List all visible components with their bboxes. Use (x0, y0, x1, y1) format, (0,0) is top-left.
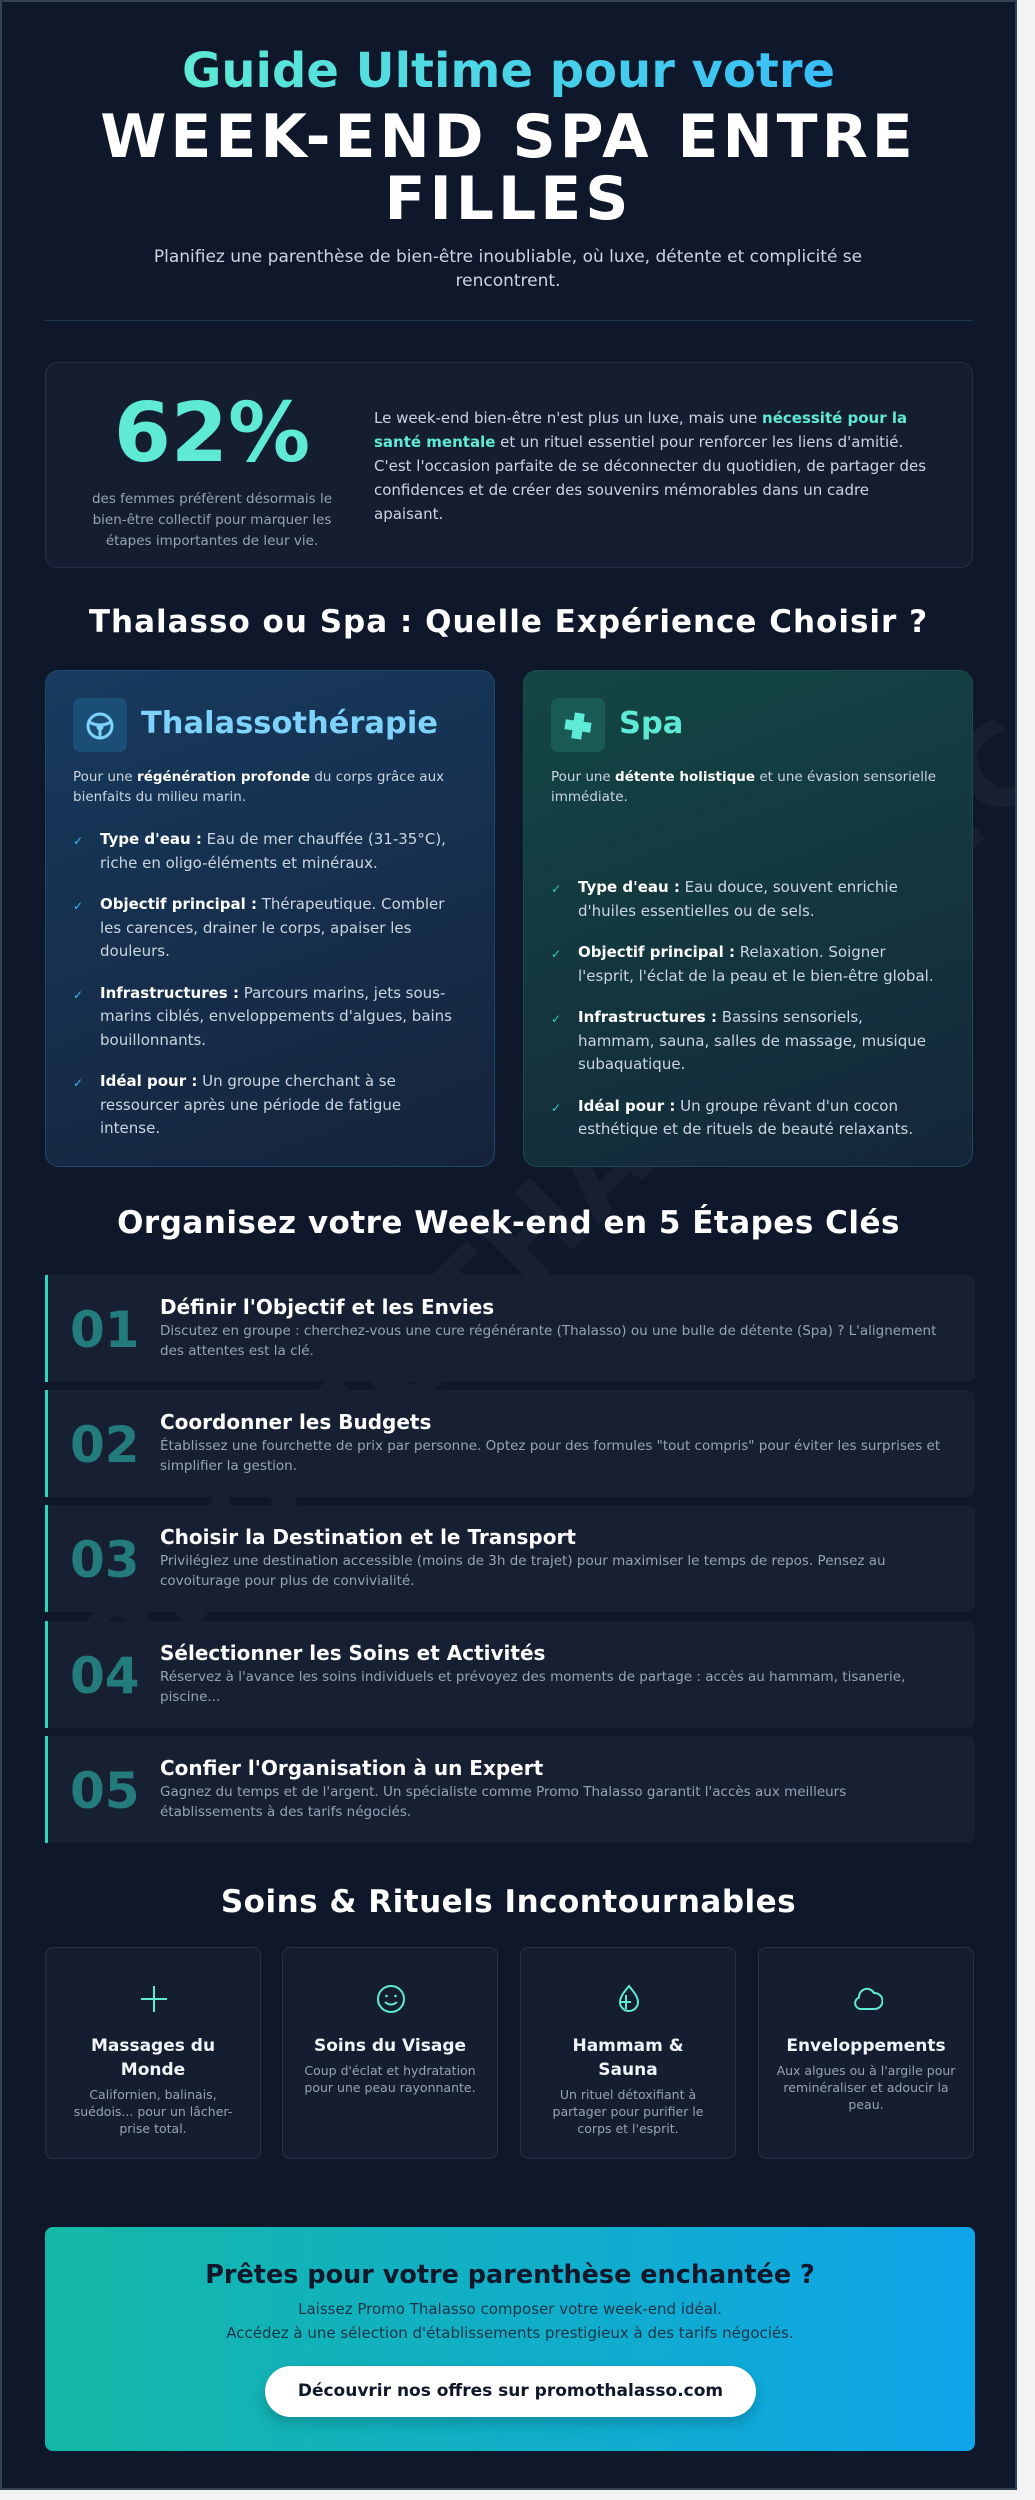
step 01: 01 (70, 1301, 140, 1359)
title: Spa (619, 706, 683, 741)
list (74, 830, 452, 1137)
soin: visage: Coup d'éclat et hydratation pour une peau rayonnante. (304, 2063, 476, 2095)
panel: thalassothérapie: Pour une régénération profonde du corps grâce aux bienfaits du milieu marin. (73, 769, 444, 805)
step 04: 04 (70, 1647, 140, 1705)
list: Idéal pour : Un groupe rêvant d'un cocon esthétique et de rituels de beauté relaxants. (578, 1096, 913, 1138)
soin: enveloppements: Enveloppements (786, 2036, 946, 2056)
list: Infrastructures : Bassins sensoriels, hammam, sauna, salles de massage, musique subaquatique. (578, 1008, 926, 1073)
CTA: Prêtes pour votre parenthèse enchantée ? (205, 2260, 815, 2290)
step 02: Coordonner les Budgets (160, 1410, 431, 1434)
step 03: Privilégiez une destination accessible (moins de 3h de trajet) pour maximiser le temps de repos. Pensez au covoiturage pour plus de convivialité. (160, 1553, 886, 1589)
step 05: Confier l'Organisation à un Expert (160, 1756, 543, 1780)
panel: thalassothérapie (45, 670, 495, 1167)
list: Infrastructures : Parcours marins, jets sous-marins ciblés, enveloppements d'algues, bains bouillonnants. (100, 984, 452, 1048)
list: Type d'eau : Eau douce, souvent enrichie d'huiles essentielles ou de sels. (578, 878, 898, 920)
step 05 (45, 1736, 975, 1843)
soin: hammam: Sauna (598, 2060, 658, 2080)
stat: 62%: 62% (114, 386, 310, 481)
soin: hammam (520, 1947, 736, 2159)
CTA: Laissez Promo Thalasso composer votre week-end idéal. (298, 2300, 722, 2318)
step 02: Établissez une fourchette de prix par personne. Optez pour des formules "tout compris" pour éviter les surprises et simplifier la gestion. (160, 1438, 940, 1474)
title (100, 43, 917, 234)
step 04 (45, 1621, 975, 1728)
soin: hammam: Hammam & (572, 2036, 684, 2056)
heading: steps: Organisez votre Week-end en 5 Étapes Clés (117, 1205, 900, 1241)
step 02 (45, 1390, 975, 1497)
step 05: Gagnez du temps et de l'argent. Un spécialiste comme Promo Thalasso garantit l'accès aux meilleurs (160, 1784, 846, 1800)
list (552, 878, 934, 1138)
intro paragraph: Le week-end bien-être n'est plus un luxe, mais une nécessité pour la santé mentale et un rituel essentiel pour renforcer les liens d'amitié. C'est l'occasion parfaite de se déconnecter du quotidien, de partager des confidences et de créer des souvenirs mémorables dans un cadre apaisant. (374, 409, 926, 523)
list: Objectif principal : Relaxation. Soigner l'esprit, l'éclat de la peau et le bien-être global. (578, 943, 934, 984)
button (265, 2366, 756, 2417)
panel: spa (523, 670, 973, 1167)
step 01: Discutez en groupe : cherchez-vous une cure régénérante (Thalasso) ou une bulle de détente (Spa) ? L'alignement des attentes est la clé. (160, 1323, 936, 1359)
step 02: 02 (70, 1416, 140, 1474)
list: Idéal pour : Un groupe cherchant à se ressourcer après une période de fatigue intense. (100, 1072, 401, 1137)
list: Objectif principal : Thérapeutique. Combler les carences, drainer le corps, apaiser les douleurs. (100, 895, 444, 960)
step 03 (45, 1505, 975, 1612)
step 05: établissements à des tarifs négociés. (160, 1804, 411, 1820)
step 05: 05 (70, 1762, 140, 1820)
icon: plus (551, 698, 605, 752)
title: FILLES (384, 164, 632, 234)
heading: soins: Soins & Rituels Incontournables (221, 1884, 796, 1920)
step 01: Définir l'Objectif et les Envies (160, 1295, 494, 1319)
title: Thalassothérapie (141, 706, 438, 741)
soin: visage (282, 1947, 498, 2159)
soin: massages: Californien, balinais, suédois... pour un lâcher-prise total. (74, 2087, 232, 2136)
soin: visage: Soins du Visage (314, 2036, 466, 2056)
button: Découvrir nos offres sur promothalasso.com (298, 2381, 723, 2401)
CTA (45, 2227, 975, 2451)
panel: spa: Pour une détente holistique et une évasion sensorielle immédiate. (551, 769, 936, 805)
step 04: Réservez à l'avance les soins individuels et prévoyez des moments de partage : accès au hammam, tisanerie, piscine... (160, 1669, 905, 1705)
title: WEEK-END SPA ENTRE (100, 102, 917, 172)
step 04: Sélectionner les Soins et Activités (160, 1641, 545, 1665)
soin: enveloppements: Aux algues ou à l'argile pour reminéraliser et adoucir la peau. (777, 2063, 955, 2112)
step 01 (45, 1275, 975, 1382)
soin: massages: Massages du Monde (91, 2036, 215, 2080)
stat: 62%: des femmes préfèrent désormais le bien-être collectif pour marquer les étapes importantes de leur vie. (92, 491, 332, 549)
stat: 62% (92, 386, 332, 549)
soin: massages (45, 1947, 261, 2159)
stat panel (45, 362, 973, 568)
step 03: Choisir la Destination et le Transport (160, 1525, 576, 1549)
heading: comparison: Thalasso ou Spa : Quelle Expérience Choisir ? (89, 604, 928, 640)
CTA: Accédez à une sélection d'établissements prestigieux à des tarifs négociés. (226, 2324, 794, 2342)
list: Type d'eau : Eau de mer chauffée (31-35°C), riche en oligo-éléments et minéraux. (100, 830, 446, 872)
soin: hammam: Un rituel détoxifiant à partager pour purifier le corps et l'esprit. (553, 2087, 703, 2136)
title: Guide Ultime pour votre (182, 43, 835, 99)
soin: enveloppements (758, 1947, 974, 2159)
step 03: 03 (70, 1531, 140, 1589)
icon: wheel (73, 698, 127, 752)
subtitle: Planifiez une parenthèse de bien-être inoubliable, où luxe, détente et complicité se rencontrent. (154, 247, 862, 291)
